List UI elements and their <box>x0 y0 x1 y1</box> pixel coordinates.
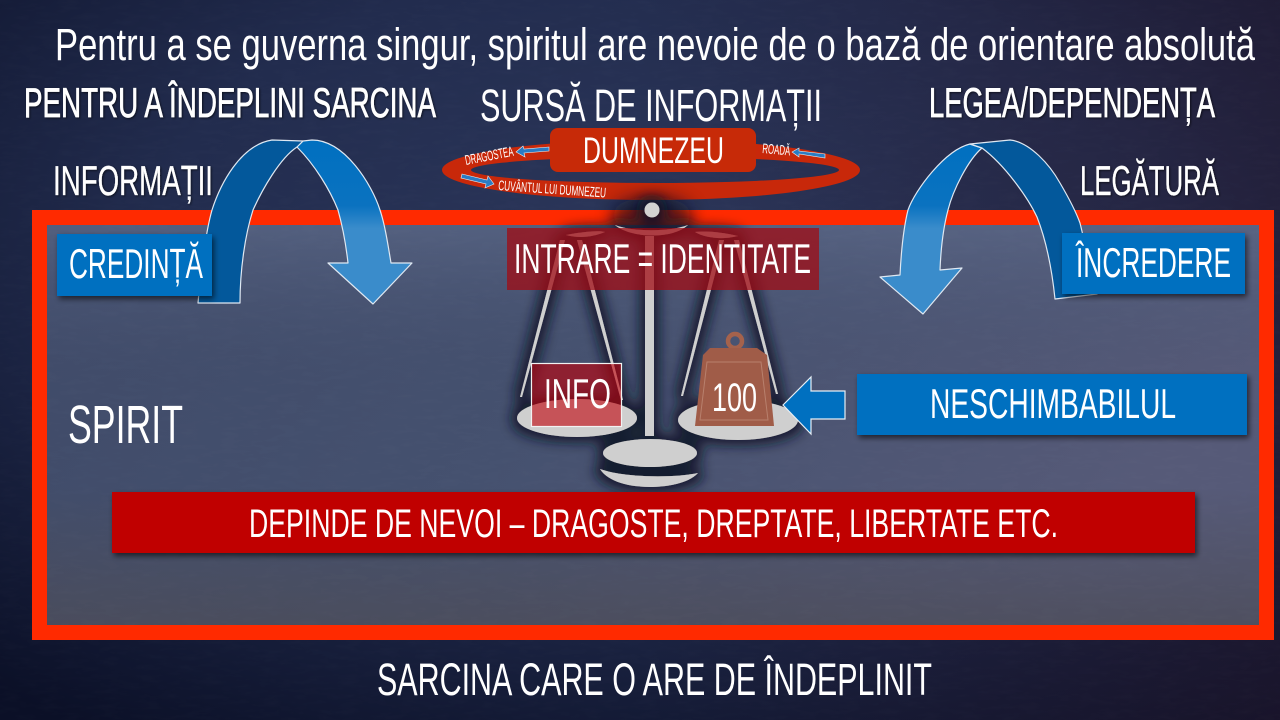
arrow: left curved <box>198 140 412 304</box>
box: dumnezeu <box>550 128 756 172</box>
diagram: god ring <box>442 128 860 201</box>
heading: pentru a indeplini sarcina: PENTRU A ÎNDEPLINI SARCINA <box>24 79 436 126</box>
ring <box>728 334 742 348</box>
base top <box>603 439 697 467</box>
small arrow: dragostea <box>516 146 549 157</box>
box: intrare = identitate: INTRARE = IDENTITATE <box>514 235 811 282</box>
wires: left <box>520 240 623 400</box>
scale shadow <box>612 197 692 233</box>
footer: SARCINA CARE O ARE DE ÎNDEPLINIT <box>377 654 932 705</box>
box: info <box>532 364 622 426</box>
box: neschimbabilul <box>857 374 1247 435</box>
ring label: cuvantul lui dumnezeu: CUVÂNTUL LUI DUMNEZEU <box>498 177 607 201</box>
number: 100 <box>712 376 757 420</box>
beam bowl <box>615 225 688 236</box>
box: incredere <box>1062 233 1245 294</box>
wires: right <box>681 240 778 396</box>
body <box>695 348 774 426</box>
label: spirit: SPIRIT <box>68 395 183 455</box>
beam arc right <box>695 231 738 238</box>
ring label: dragostea: DRAGOSTEA <box>464 143 515 168</box>
icon: weight 100 <box>695 334 774 426</box>
pivot <box>644 202 660 218</box>
arrow: pointing to weight <box>783 377 845 434</box>
beam arc left <box>566 231 605 237</box>
arrow: right curved <box>880 140 1097 314</box>
ring <box>442 140 860 200</box>
label: informatii: INFORMAȚII <box>53 157 213 204</box>
box: depinde de nevoi <box>112 492 1195 553</box>
box: credinta <box>57 234 212 296</box>
box: credinta: CREDINȚĂ <box>69 240 203 287</box>
heading: sursa de informatii: SURSĂ DE INFORMAȚII <box>480 80 822 131</box>
pole <box>645 236 654 436</box>
box: dumnezeu: DUMNEZEU <box>583 130 724 171</box>
pan: left <box>517 399 637 437</box>
small arrow: roada <box>792 148 825 158</box>
base bottom <box>600 469 698 487</box>
pan: right <box>678 400 798 440</box>
box: info: INFO <box>544 370 611 417</box>
box: intrare = identitate <box>507 228 819 290</box>
icon: balance scale <box>517 197 798 487</box>
ring label: roada: ROADĂ <box>762 140 791 158</box>
small arrow: cuvantul <box>461 174 494 188</box>
